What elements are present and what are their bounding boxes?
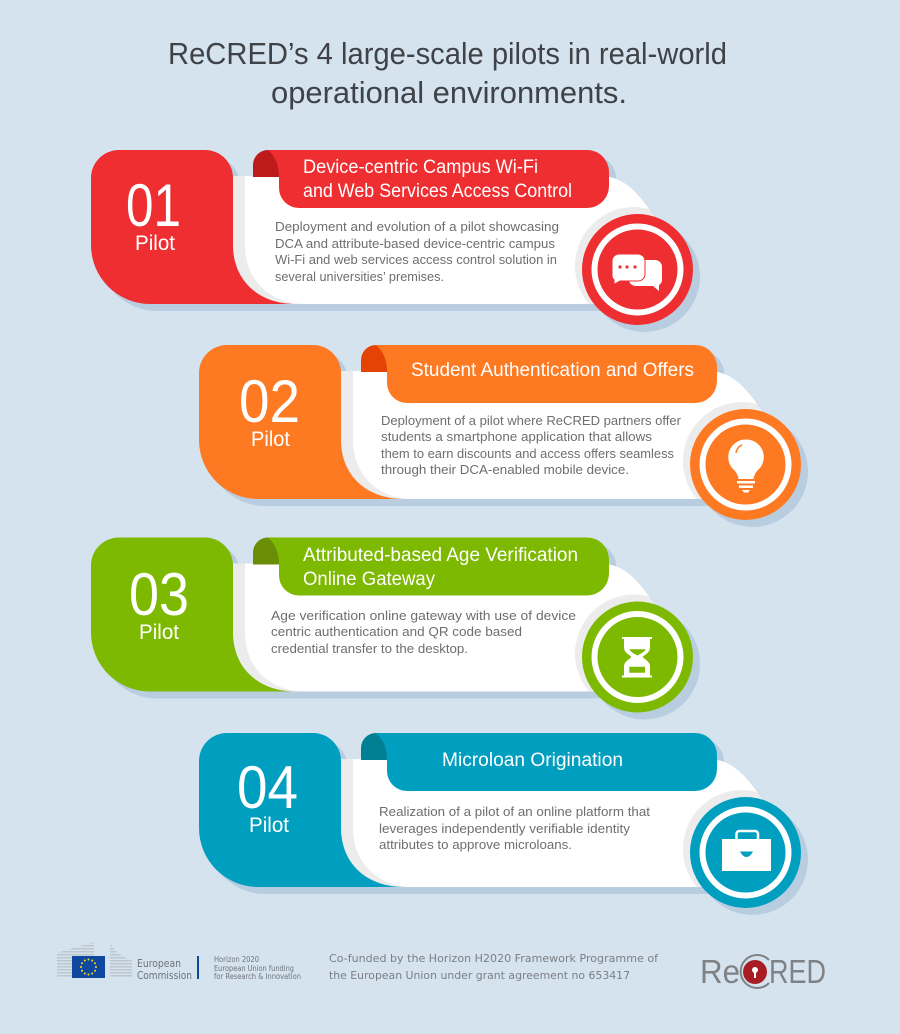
description: attributes to approve microloans. xyxy=(379,837,572,852)
pilot label: Pilot xyxy=(251,428,290,451)
heading text: Online Gateway xyxy=(303,569,435,590)
heading tab xyxy=(376,733,717,791)
card xyxy=(353,371,763,499)
description: them to earn discounts and access offers seamless xyxy=(381,446,674,461)
number block xyxy=(91,150,300,304)
wordmark xyxy=(137,958,192,982)
number: 03 xyxy=(129,561,189,628)
description: centric authentication and QR code based xyxy=(271,624,522,639)
tab fold xyxy=(253,538,282,564)
panel: pilot 02 xyxy=(199,345,808,527)
description: credential transfer to the desktop. xyxy=(271,641,468,656)
icon: commission building xyxy=(57,942,132,978)
description: Deployment of a pilot where ReCRED partners offer xyxy=(381,413,682,428)
footer: funding statement xyxy=(329,952,659,982)
number block xyxy=(199,733,408,887)
Horizon 2020 text: Horizon 2020 xyxy=(214,955,259,964)
Horizon 2020 text: European Union funding xyxy=(214,964,294,973)
icon: EU flag xyxy=(72,956,105,978)
Horizon 2020 text: for Research & Innovation xyxy=(214,972,301,981)
icon: hourglass xyxy=(582,602,700,720)
description: through their DCA-enabled mobile device. xyxy=(381,462,629,477)
pilot label: Pilot xyxy=(135,232,175,255)
heading text xyxy=(303,157,572,202)
panel: pilot 01 xyxy=(91,150,700,332)
wordmark: Commission xyxy=(137,970,192,982)
description: Realization of a pilot of an online platform that xyxy=(379,804,650,819)
description: several universities’ premises. xyxy=(275,269,444,284)
number: 01 xyxy=(126,172,181,239)
title xyxy=(168,36,727,110)
card xyxy=(353,759,763,887)
number block xyxy=(91,538,300,692)
heading text: Student Authentication and Offers xyxy=(411,360,694,381)
description xyxy=(381,413,682,477)
pilot label: Pilot xyxy=(249,814,289,837)
description xyxy=(275,219,559,284)
description: Deployment and evolution of a pilot showcasing xyxy=(275,219,559,234)
panel: pilot 04 xyxy=(199,733,808,915)
footer: ReCRED logo xyxy=(700,953,826,990)
Horizon 2020 text xyxy=(214,955,301,981)
heading tab xyxy=(268,538,609,596)
footer: funding statement: the European Union under grant agreement no 653417 xyxy=(329,969,630,982)
icon: briefcase xyxy=(690,797,808,915)
card fold xyxy=(341,371,428,499)
pilot label: Pilot xyxy=(139,621,179,644)
description xyxy=(379,804,650,852)
heading text: Microloan Origination xyxy=(442,750,623,771)
heading tab xyxy=(376,345,717,403)
tab fold xyxy=(361,345,390,372)
heading text xyxy=(303,545,578,590)
title: operational environments. xyxy=(271,75,627,110)
card xyxy=(245,564,655,692)
number: 02 xyxy=(239,368,300,435)
footer: European Commission logo xyxy=(57,942,301,982)
card fold xyxy=(341,759,428,887)
footer: funding statement: Co-funded by the Horizon H2020 Framework Programme of xyxy=(329,952,659,965)
number block xyxy=(199,345,408,499)
title: ReCRED’s 4 large-scale pilots in real-world xyxy=(168,36,727,71)
footer: ReCRED logo: Re xyxy=(700,953,740,990)
panel: pilot 03 xyxy=(91,538,700,720)
card fold xyxy=(233,176,320,304)
heading text: Attributed-based Age Verification xyxy=(303,545,578,566)
icon: chat bubbles xyxy=(582,214,700,332)
tab fold xyxy=(361,733,390,760)
card xyxy=(245,176,655,304)
wordmark: European xyxy=(137,958,181,970)
description xyxy=(271,608,576,656)
description: DCA and attribute-based device-centric campus xyxy=(275,236,556,251)
footer: ReCRED logo: RED xyxy=(769,953,826,990)
heading text: Device-centric Campus Wi-Fi xyxy=(303,157,538,178)
number: 04 xyxy=(237,754,298,821)
card fold xyxy=(233,564,320,692)
tab fold xyxy=(253,150,282,177)
description: Age verification online gateway with use of device xyxy=(271,608,576,623)
description: students a smartphone application that allows xyxy=(381,429,653,444)
heading tab xyxy=(268,150,609,208)
heading text: and Web Services Access Control xyxy=(303,181,572,202)
icon: light bulb xyxy=(690,409,808,527)
description: leverages independently verifiable identity xyxy=(379,821,631,836)
description: Wi-Fi and web services access control solution in xyxy=(275,252,557,267)
